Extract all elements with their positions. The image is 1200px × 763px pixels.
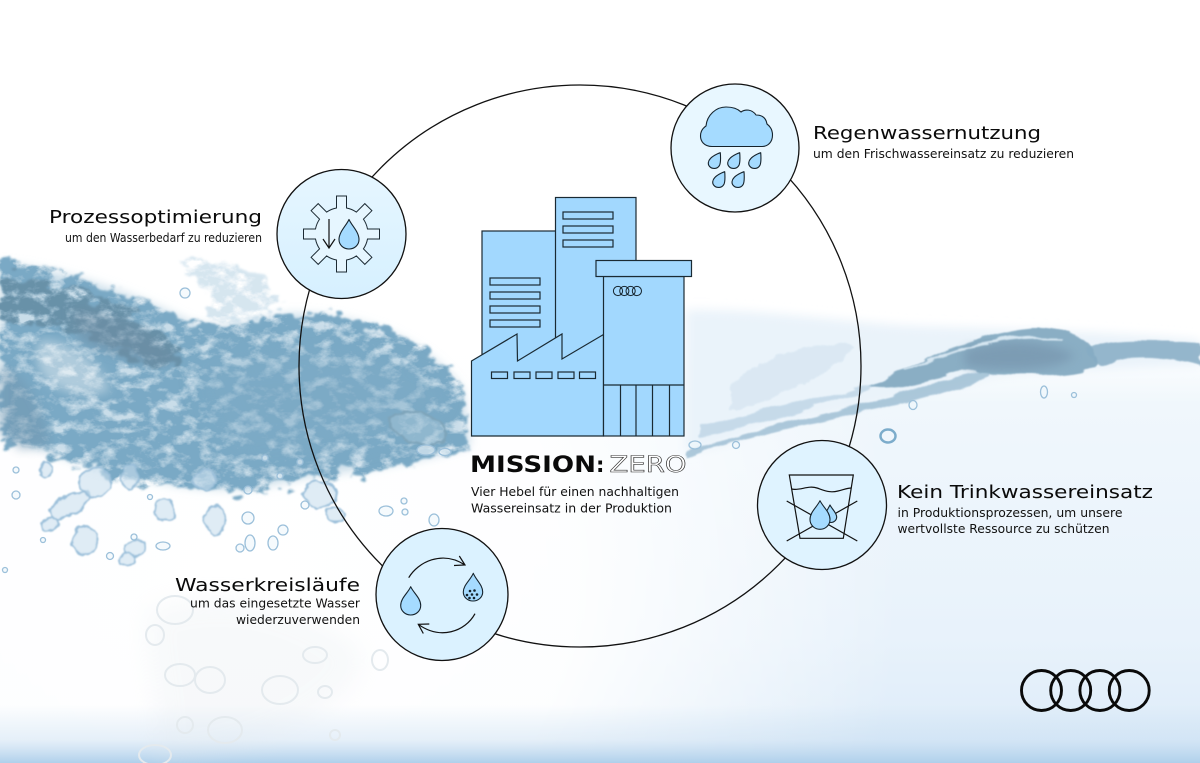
factory hall: [472, 334, 604, 436]
icon: cross lines: [787, 501, 857, 541]
icon: top cycle arrow: [409, 556, 465, 578]
title: Mission Zero: ZERO: [610, 453, 686, 478]
lever: no drinking water icon: [758, 440, 886, 570]
icon: water drop: [339, 220, 359, 249]
faint lower bubbles: [139, 596, 388, 763]
middle tower windows: [563, 212, 613, 247]
left tower: [482, 231, 556, 381]
main ring connecting the four levers: [299, 85, 861, 647]
lower-left bubble clusters: [39, 461, 344, 566]
right water wave: [686, 310, 1200, 458]
lever: water cycle icon: [376, 528, 508, 660]
icon: bottom cycle arrow: [418, 614, 475, 634]
label: Regenwassernutzung: um den Frischwassereinsatz zu reduzieren: [813, 146, 1074, 161]
right building: [604, 276, 684, 436]
subtitle: Vier Hebel für einen nachhaltigen: [471, 484, 679, 499]
left water mass: [0, 261, 470, 494]
icon: small drop: [825, 505, 837, 522]
label: Kein Trinkwassereinsatz: wertvollste Ressource zu schützen: [898, 521, 1110, 536]
right building columns: [604, 385, 684, 436]
icon: gear: [304, 196, 380, 272]
label: Prozessoptimierung: [49, 208, 262, 245]
small four rings logo: [613, 286, 642, 296]
background: water photograph: [0, 261, 1200, 763]
label: Kein Trinkwassereinsatz: Kein Trinkwassereinsatz: [897, 483, 1153, 503]
icon: down arrow: [323, 219, 335, 248]
lever: rainwater icon: [671, 84, 799, 212]
label: Regenwassernutzung: Regenwassernutzung: [813, 124, 1041, 144]
middle tower: [556, 198, 636, 368]
label: Prozessoptimierung: Prozessoptimierung: [49, 208, 262, 228]
label: Wasserkreisläufe: [175, 576, 361, 627]
icon: dirty drop: [463, 573, 483, 601]
subtitle: Wassereinsatz in der Produktion: [471, 500, 672, 516]
icon: cloud: [700, 107, 772, 146]
icon: large drop: [810, 501, 830, 529]
bubbles: [2, 288, 1076, 572]
icon: glass: [789, 475, 853, 538]
title: Mission Zero: :: [596, 453, 604, 477]
title: Mission Zero: MISSION: [470, 453, 596, 478]
right building roof: [596, 260, 692, 276]
left tower windows: [490, 278, 540, 327]
icon: rain drops: [708, 153, 761, 187]
icon: particles: [466, 589, 478, 599]
title: Mission Zero: [470, 453, 686, 478]
label: Wasserkreisläufe: wiederzuverwenden: [236, 612, 360, 627]
reflection at the bottom: [148, 598, 361, 763]
Audi rings logo: [1022, 670, 1149, 710]
label: Regenwassernutzung: [813, 124, 1074, 161]
icon: water level: [792, 487, 852, 492]
label: Prozessoptimierung: um den Wasserbedarf zu reduzieren: [65, 230, 262, 245]
factory windows: [492, 372, 596, 378]
factory illustration: [472, 198, 692, 436]
icon: clean drop: [401, 587, 421, 615]
subtitle: [471, 484, 679, 516]
lever: process optimisation icon: [277, 170, 406, 298]
label: Wasserkreisläufe: um das eingesetzte Wasser: [190, 596, 361, 610]
label: Kein Trinkwassereinsatz: in Produktionsprozessen, um unsere: [898, 505, 1123, 520]
label: Kein Trinkwassereinsatz: [897, 483, 1153, 536]
label: Wasserkreisläufe: Wasserkreisläufe: [175, 576, 360, 596]
